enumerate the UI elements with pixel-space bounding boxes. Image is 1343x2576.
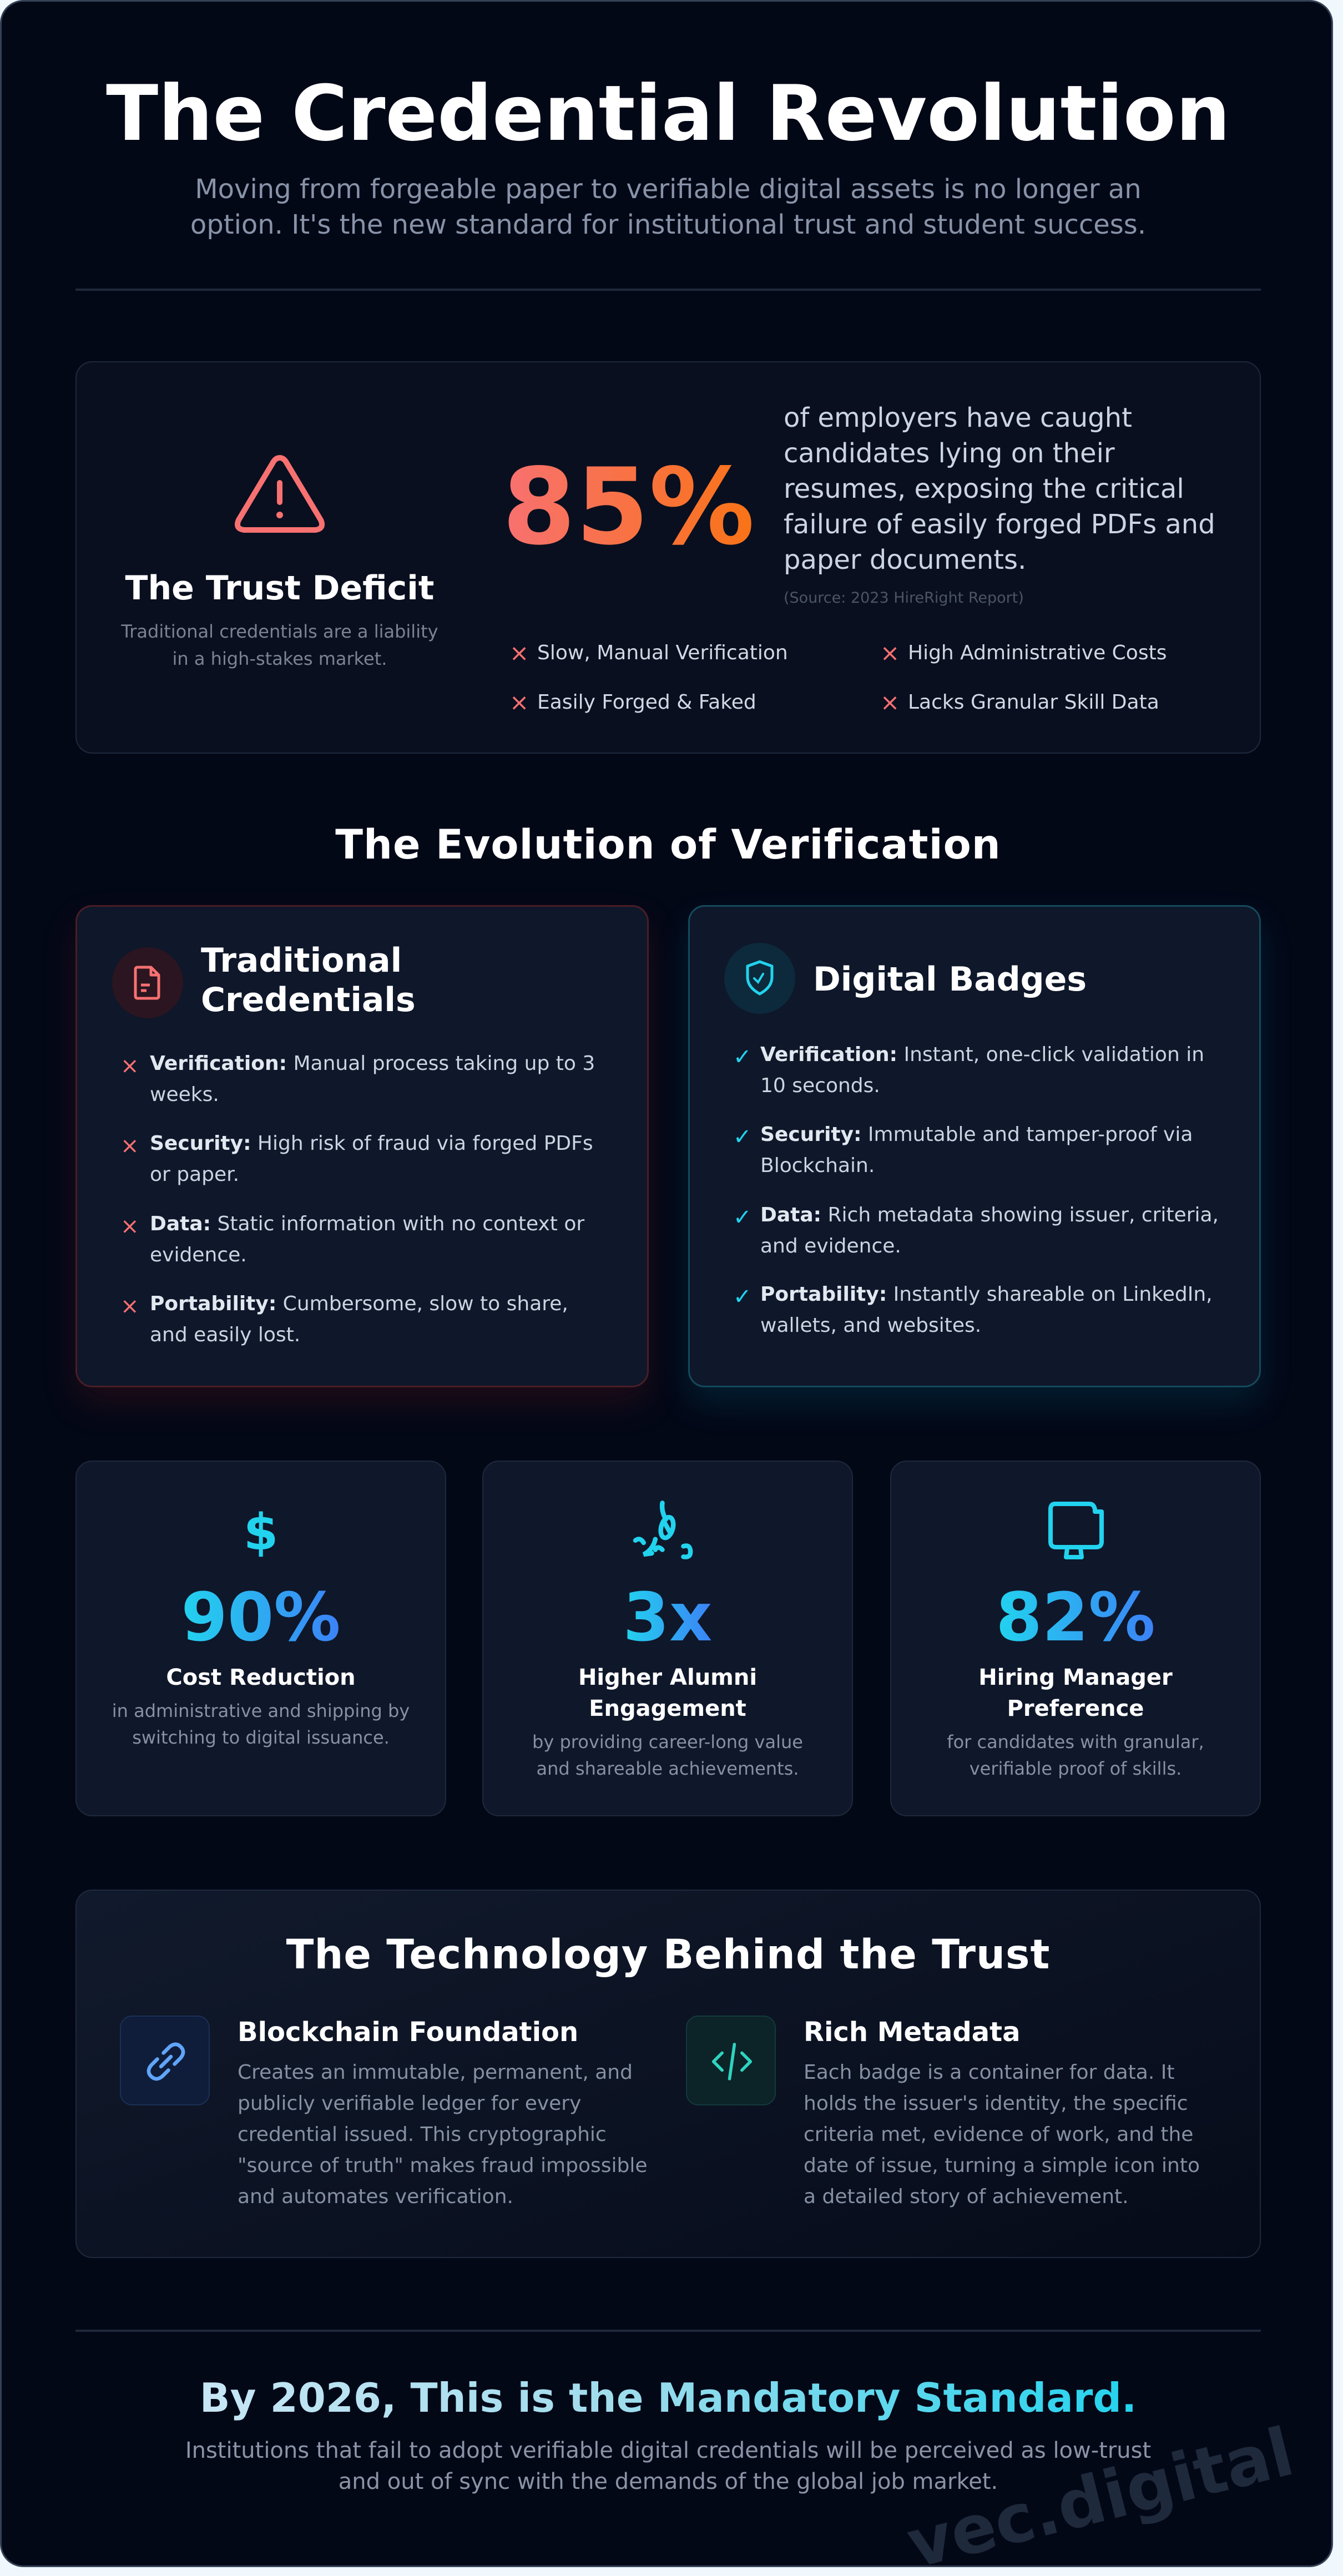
text: 85% description: of employers have caught [784, 402, 1132, 433]
list: digital benefits: Security: Immutable and tamper-proof via [760, 1123, 1193, 1146]
text: rich metadata: date of issue, turning a simple icon into [804, 2154, 1200, 2177]
list: traditional drawbacks: × [120, 1133, 139, 1159]
number: 82%: 82% [996, 1579, 1155, 1656]
heading: mandatory standard: By 2026, This is the Mandatory Standard. [200, 2375, 1137, 2421]
panel: technology [75, 1890, 1261, 2258]
label: hiring manager preference: Hiring Manager [978, 1665, 1173, 1690]
text: blockchain foundation: "source of truth" makes fraud impossible [238, 2154, 648, 2177]
list: traditional drawbacks: Data: Static information with no context or [150, 1213, 584, 1235]
list: problems: × [509, 689, 529, 716]
label: cost reduction: switching to digital issuance. [132, 1727, 390, 1748]
heading: evolution of verification: The Evolution of Verification [335, 821, 1001, 868]
panel: trust deficit [75, 361, 1261, 754]
list: digital benefits: wallets, and websites. [760, 1314, 981, 1337]
list: problems: Slow, Manual Verification [537, 642, 788, 664]
subtitle: option. It's the new standard for institutional trust and student success. [190, 209, 1146, 240]
text: blockchain foundation: publicly verifiable ledger for every [238, 2092, 581, 2115]
heading: digital badges: Digital Badges [813, 960, 1087, 999]
text: 85% description: candidates lying on their [784, 438, 1115, 469]
list: digital benefits: 10 seconds. [760, 1074, 880, 1097]
label: higher alumni engagement [532, 1665, 803, 1779]
list: digital benefits: ✓ [733, 1205, 752, 1230]
heading: traditional credentials [201, 941, 416, 1019]
icon: document [112, 947, 183, 1018]
stat: 85%: 85% [502, 446, 755, 568]
label: hiring manager preference: for candidates with granular, [947, 1731, 1204, 1752]
text: blockchain foundation: Creates an immutable, permanent, and [238, 2061, 633, 2084]
text: trust deficit subtitle: in a high-stakes market. [173, 648, 387, 669]
text: conclusion [185, 2438, 1151, 2494]
text: blockchain foundation [238, 2017, 648, 2208]
icon: dollar: $ [244, 1503, 278, 1562]
list: digital benefits: Verification: Instant, one-click validation in [760, 1043, 1204, 1066]
label: higher alumni engagement: Engagement [589, 1696, 746, 1721]
text: rich metadata [804, 2017, 1200, 2208]
list: problems: × [880, 689, 900, 716]
list: digital benefits: and evidence. [760, 1235, 901, 1257]
list: traditional drawbacks: × [120, 1294, 139, 1319]
list: traditional drawbacks: × [120, 1214, 139, 1239]
label: higher alumni engagement: by providing career-long value [532, 1731, 803, 1752]
subtitle: Moving from forgeable paper to verifiable digital assets is no longer an [195, 174, 1142, 205]
icon: warning triangle [234, 455, 325, 533]
text: rich metadata: Rich Metadata [804, 2017, 1020, 2048]
list: digital benefits: Portability: Instantly shareable on LinkedIn, [760, 1283, 1213, 1306]
label: higher alumni engagement: Higher Alumni [578, 1665, 757, 1690]
text: conclusion: and out of sync with the demands of the global job market. [339, 2469, 998, 2494]
text: rich metadata: Each badge is a container for data. It [804, 2061, 1174, 2084]
list: digital benefits: ✓ [733, 1044, 752, 1070]
heading: technology behind the trust: The Technology Behind the Trust [286, 1931, 1050, 1978]
text: blockchain foundation: and automates verification. [238, 2185, 513, 2208]
list: digital benefits: Blockchain. [760, 1154, 875, 1177]
text: 85% description: resumes, exposing the critical [784, 473, 1184, 504]
list: traditional drawbacks: weeks. [150, 1083, 219, 1106]
icon: link [120, 2016, 210, 2105]
label: cost reduction: in administrative and shipping by [112, 1700, 410, 1721]
icon: shield [724, 943, 795, 1014]
list: problems: Easily Forged & Faked [537, 691, 756, 714]
text: rich metadata: holds the issuer's identity, the specific [804, 2092, 1188, 2115]
list: traditional drawbacks [120, 1052, 595, 1346]
text: blockchain foundation: Blockchain Foundation [238, 2017, 578, 2048]
list: traditional drawbacks: Verification: Manual process taking up to 3 [150, 1052, 595, 1075]
text: trust deficit subtitle: Traditional credentials are a liability [121, 621, 438, 642]
list: digital benefits: ✓ [733, 1124, 752, 1150]
icon: broken handshake [633, 1501, 693, 1559]
list: traditional drawbacks: × [120, 1053, 139, 1079]
list: traditional drawbacks: or paper. [150, 1163, 239, 1186]
label: hiring manager preference [947, 1665, 1204, 1779]
text: 85% description [784, 402, 1215, 575]
panel: traditional credentials [75, 905, 649, 1387]
list: problems: × [509, 639, 529, 666]
list: traditional drawbacks: and easily lost. [150, 1324, 300, 1346]
subtitle [190, 174, 1146, 240]
list: problems [509, 639, 1167, 716]
text: blockchain foundation: credential issued. This cryptographic [238, 2123, 607, 2146]
list: digital benefits: ✓ [733, 1284, 752, 1310]
label: cost reduction [112, 1665, 410, 1748]
title: The Credential Revolution [106, 69, 1230, 158]
stat card: cost reduction [75, 1461, 446, 1816]
list: problems: High Administrative Costs [908, 642, 1167, 664]
text: 85% description: failure of easily forged PDFs and [784, 509, 1215, 540]
heading: the trust deficit: The Trust Deficit [125, 569, 434, 608]
text: conclusion: Institutions that fail to adopt verifiable digital credentials will be perceived as low-trust [185, 2438, 1151, 2463]
number: 90%: 90% [181, 1579, 341, 1656]
stat card: hiring manager preference [890, 1461, 1261, 1816]
list: traditional drawbacks: evidence. [150, 1244, 247, 1266]
label: hiring manager preference: Preference [1007, 1696, 1144, 1721]
text: rich metadata: a detailed story of achievement. [804, 2185, 1129, 2208]
list: digital benefits: Data: Rich metadata showing issuer, criteria, [760, 1204, 1219, 1226]
list: problems: Lacks Granular Skill Data [908, 691, 1159, 714]
label: higher alumni engagement: and shareable achievements. [537, 1758, 799, 1779]
heading: traditional credentials: Credentials [201, 981, 416, 1019]
text: rich metadata: criteria met, evidence of work, and the [804, 2123, 1193, 2146]
text: 85% description: paper documents. [784, 544, 1026, 575]
list: traditional drawbacks: Portability: Cumbersome, slow to share, [150, 1292, 568, 1315]
stat card: alumni engagement [482, 1461, 853, 1816]
text: source: (Source: 2023 HireRight Report) [784, 589, 1024, 607]
text: trust deficit subtitle [121, 621, 438, 669]
label: hiring manager preference: verifiable proof of skills. [970, 1758, 1182, 1779]
icon: code [686, 2016, 776, 2105]
panel: digital badges [688, 905, 1261, 1387]
list: problems: × [880, 639, 900, 666]
list: traditional drawbacks: Security: High risk of fraud via forged PDFs [150, 1132, 593, 1155]
list: digital benefits [733, 1043, 1219, 1337]
number: 3x: 3x [623, 1579, 712, 1656]
label: cost reduction: Cost Reduction [166, 1665, 356, 1690]
icon: monitor [1048, 1502, 1104, 1559]
heading: traditional credentials: Traditional [201, 941, 402, 980]
